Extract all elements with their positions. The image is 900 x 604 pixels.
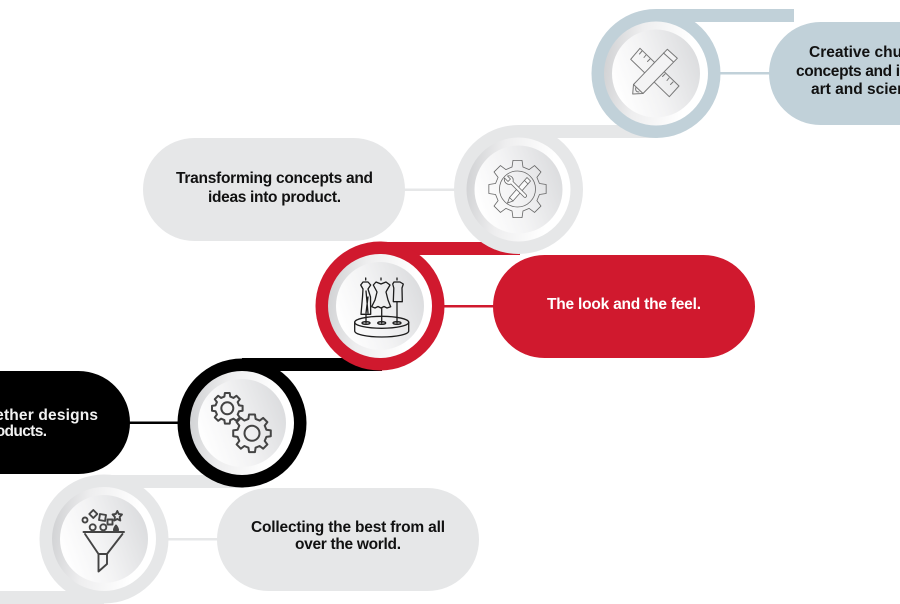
- step 4: bringing together: [128, 358, 382, 488]
- step 1: creative: [592, 9, 794, 138]
- pill: collecting: over the world.: [295, 536, 401, 553]
- pill: look and feel: The look and the feel.: [547, 296, 701, 313]
- pill: bringing together: [0, 371, 130, 474]
- pill: collecting: [217, 488, 479, 591]
- pill: collecting: Collecting the best from all: [251, 519, 445, 536]
- icon: dress mannequins: [355, 278, 409, 337]
- pill: transforming: ideas into product.: [208, 189, 341, 206]
- pill: look and feel: [493, 255, 755, 358]
- icon: funnel: [82, 510, 124, 572]
- pill: transforming: Transforming concepts and: [176, 170, 373, 187]
- icon: ruler and pencil: [631, 48, 679, 97]
- step 3: look and feel: [316, 242, 520, 370]
- icon: two gears: [212, 393, 271, 452]
- pill: creative: [769, 22, 900, 125]
- pill: transforming: [143, 138, 405, 241]
- icon: gear with wrench and pencil: [489, 160, 546, 218]
- step 2: transforming: [404, 125, 658, 254]
- step 5: collecting: [0, 474, 244, 604]
